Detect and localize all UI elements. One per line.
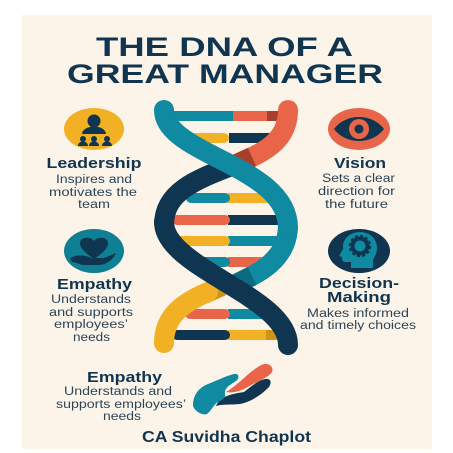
strand: teal upper — [164, 110, 288, 228]
rungs — [172, 111, 280, 340]
heading: vision: Vision — [334, 155, 386, 172]
panel: empathy lower — [56, 364, 273, 423]
author credit: CA Suvidha Chaplot — [142, 429, 312, 446]
icon: eye — [328, 108, 390, 150]
heading: decision-making — [319, 275, 399, 306]
heading: decision-making: Decision- — [319, 275, 399, 292]
title: THE DNA OF A — [96, 32, 353, 62]
text: empathy lower description — [56, 386, 186, 423]
panel: leadership — [46, 108, 142, 211]
strand: orange to navy — [250, 110, 288, 158]
DNA double helix — [164, 110, 288, 345]
icon: team — [64, 108, 124, 150]
strand: navy lower — [164, 222, 288, 345]
heading: empathy lower: Empathy — [87, 369, 163, 386]
heading: empathy: Empathy — [57, 276, 133, 293]
text: vision description — [318, 173, 395, 211]
text: empathy description: and supports — [49, 307, 133, 319]
text: leadership description — [49, 174, 137, 211]
text: decision-making description: Makes informed — [307, 308, 409, 320]
text: empathy lower description: Understands and — [64, 386, 172, 398]
text: empathy lower description: supports employees’ — [56, 399, 186, 411]
icon: hands — [193, 364, 273, 414]
heading: decision-making: Making — [327, 289, 391, 306]
text: leadership description: team — [78, 199, 110, 211]
text: decision-making description — [300, 308, 416, 332]
text: empathy description: employees’ — [54, 319, 128, 331]
text: empathy lower description: needs — [103, 411, 141, 423]
text: empathy description: Understands — [51, 294, 131, 306]
icon: heart in hand — [64, 229, 124, 273]
panel: vision — [318, 108, 395, 211]
text: leadership description: Inspires and — [56, 174, 132, 186]
text: decision-making description: and timely choices — [300, 320, 416, 332]
icon: head with gear — [328, 229, 390, 273]
text: empathy description — [49, 294, 133, 344]
text: vision description: direction for — [318, 186, 395, 198]
strand: teal to yellow — [250, 225, 288, 277]
text: vision description: the future — [325, 199, 388, 211]
panel: empathy — [49, 229, 133, 344]
heading: leadership: Leadership — [46, 155, 142, 172]
text: empathy description: needs — [73, 332, 110, 344]
panel: decision-making — [300, 229, 416, 332]
title: GREAT MANAGER — [67, 59, 383, 89]
title — [67, 32, 383, 89]
text: vision description: Sets a clear — [322, 173, 395, 185]
text: leadership description: motivates the — [49, 187, 137, 199]
